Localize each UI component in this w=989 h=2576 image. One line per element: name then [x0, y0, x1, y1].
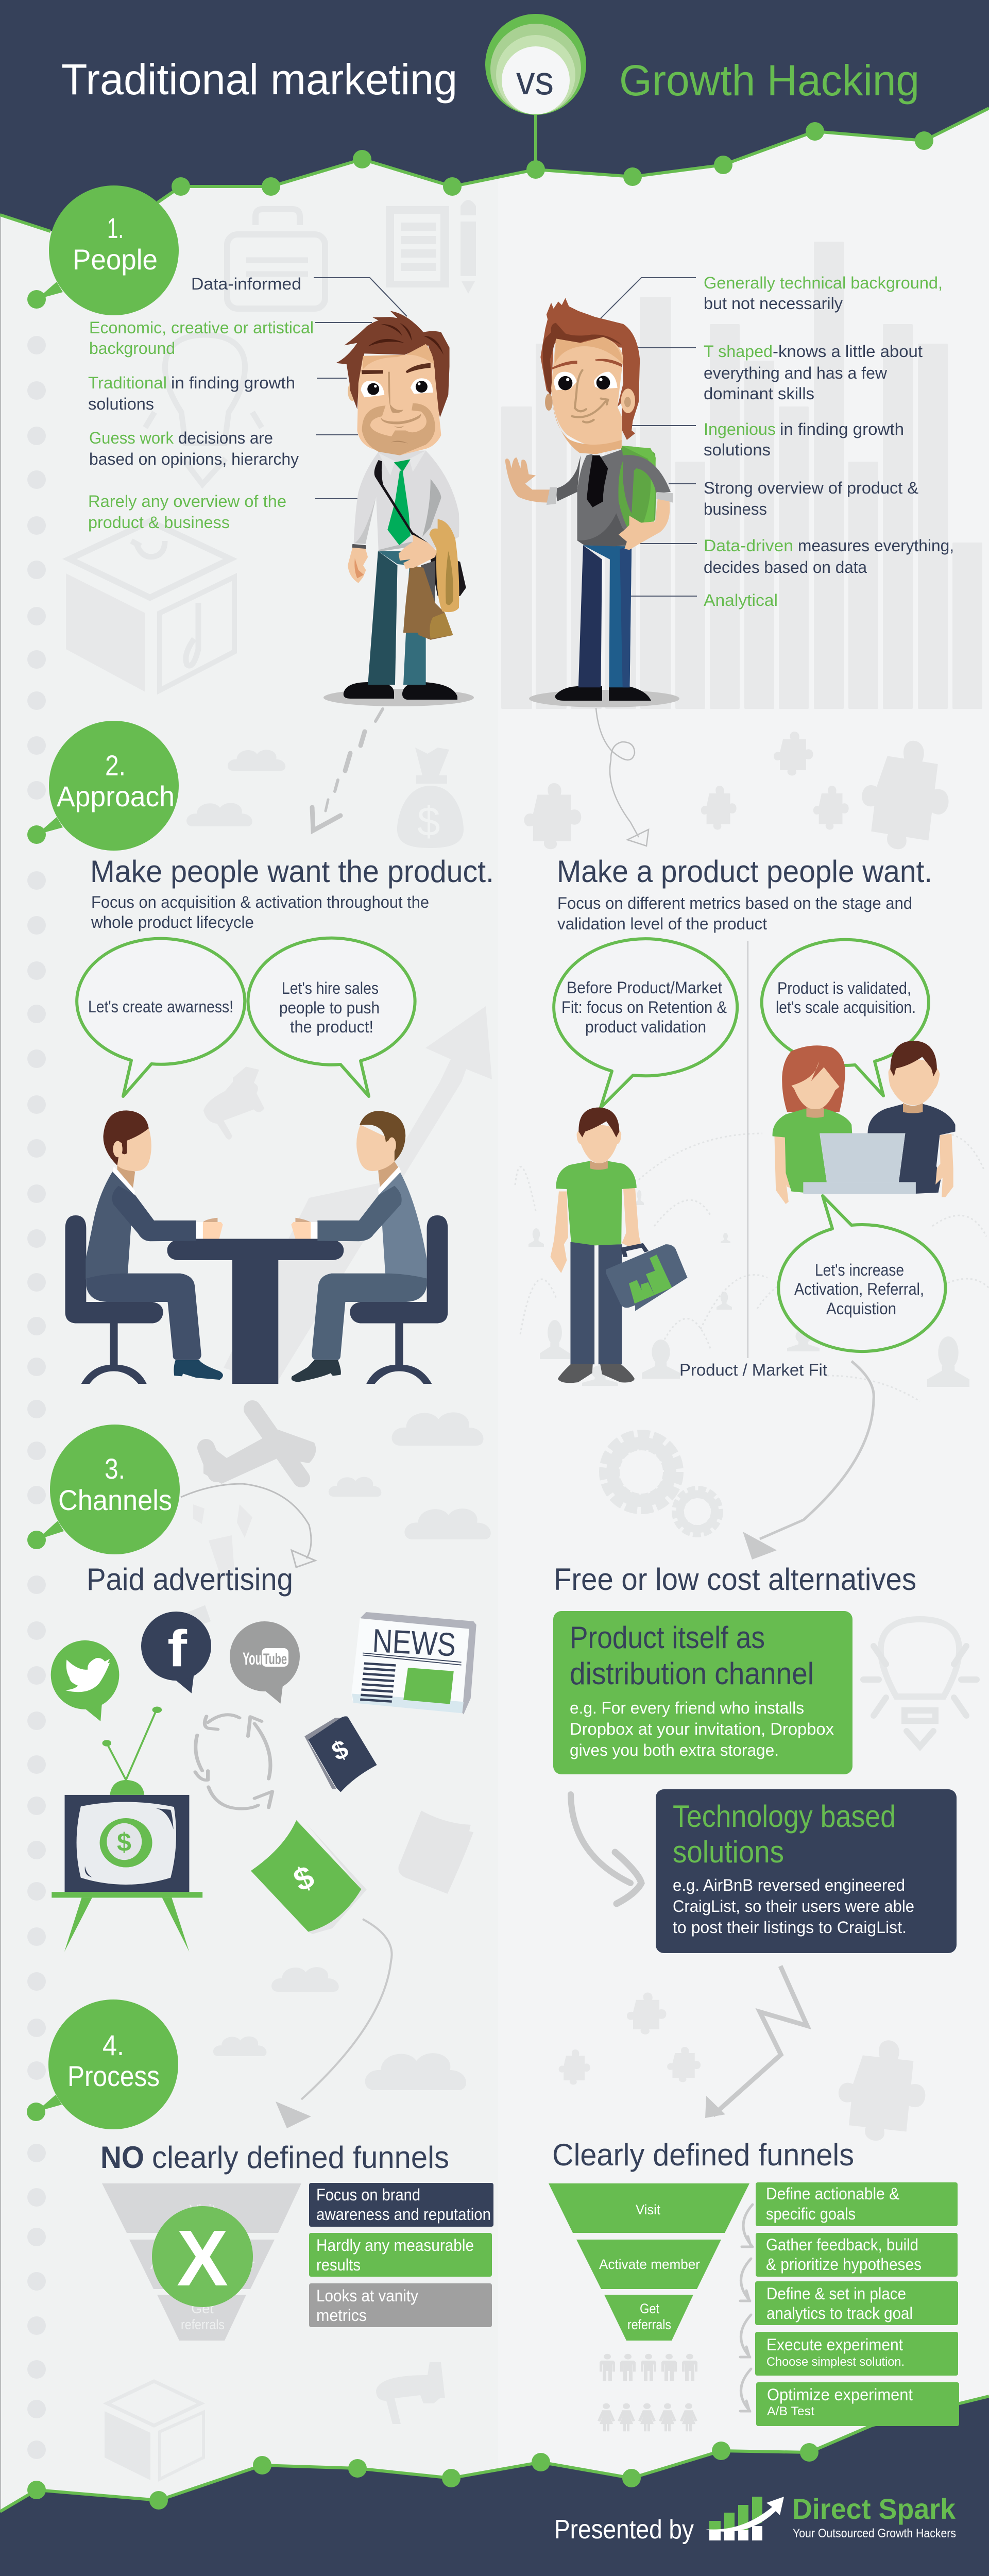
background icon: faint paper: [398, 1810, 473, 1894]
text: growth hacker traits: Ingenious: [704, 420, 776, 438]
text: growth hacker traits: decides based on data: [704, 558, 867, 577]
divider line: [747, 941, 748, 1358]
text: growth approach description: validation level of the product: [557, 914, 767, 933]
character: man with chart briefcase: [551, 1108, 688, 1383]
box: vanity metrics: Looks at vanity: [316, 2286, 418, 2305]
arrow: paid to process: [276, 1919, 392, 2128]
speech bubble: increase activation: Activation, Referral,: [794, 1280, 924, 1298]
text: growth hacker traits: in finding growth: [780, 420, 904, 438]
arrows: between steps: [740, 2205, 753, 2411]
funnel: growth: Get: [640, 2301, 659, 2316]
box: step 4 execute: Choose simplest solution.: [766, 2355, 905, 2369]
vs badge: vs: [516, 58, 554, 103]
text: growth hacker traits: dominant skills: [704, 384, 814, 403]
funnel: crossed out: [102, 2183, 301, 2341]
section badge: 3 Channels: [27, 1425, 180, 1554]
header band: [0, 0, 989, 231]
background icon: megaphone: [203, 1066, 264, 1140]
speech bubble: before fit: Before Product/Market: [567, 978, 722, 997]
card: technology based solutions: to post their listings to CraigList.: [673, 1918, 907, 1937]
speech bubble: product validated: Product is validated,: [777, 979, 911, 997]
heading: make people want the product: Make people want the product.: [90, 854, 494, 889]
box: step 1 goals: Define actionable &: [766, 2184, 899, 2203]
section badge: 1 People: People: [73, 243, 158, 276]
background icon: megaphone bottom: [376, 2362, 445, 2424]
card: technology based solutions: e.g. AirBnB reversed engineered: [673, 1876, 905, 1894]
background icon: suitcase: [227, 209, 325, 309]
box: step 5 optimize: Optimize experiment: [767, 2385, 913, 2404]
text: traditional traits: solutions: [88, 395, 154, 413]
funnel: crossed out: referrals: [181, 2317, 225, 2332]
background icon: big arrow: [224, 1006, 492, 1384]
icon: facebook bubble: [141, 1605, 211, 1693]
background icon: paper and pencil: [386, 200, 476, 294]
section badge: 4 Process: 4.: [103, 2029, 124, 2061]
text: growth hacker traits: solutions: [704, 440, 771, 459]
heading: clearly defined funnels: Clearly defined funnels: [552, 2138, 854, 2172]
vs badge: [485, 14, 586, 115]
box: hardly measurable: Hardly any measurable: [316, 2236, 474, 2255]
icon: youtube bubble: You: [243, 1649, 262, 1669]
funnel: growth: Activate member: [599, 2257, 700, 2272]
background icon: clouds channels: [193, 1412, 491, 1579]
box: step 1 goals: [756, 2182, 958, 2226]
speech bubble: before fit: Fit: focus on Retention &: [561, 998, 727, 1016]
arrow: dashed to approach left: [312, 709, 383, 831]
background icon: lightbulb: [145, 335, 262, 484]
background icon: gears: [609, 1440, 717, 1531]
card: product as distribution channel: Dropbox at your invitation, Dropbox: [570, 1720, 834, 1738]
section badge: 1 People: [27, 185, 179, 315]
icon: youtube bubble: [230, 1621, 300, 1704]
icon: cycle arrows: [195, 1715, 272, 1809]
card: technology based solutions: CraigList, so their users were able: [673, 1897, 914, 1916]
text: traditional traits: background: [89, 339, 175, 358]
speech bubble: increase activation: Let's increase: [815, 1261, 904, 1279]
speech bubble: product validated: let's scale acquisition.: [776, 998, 916, 1016]
funnel: crossed out: X: [177, 2214, 228, 2302]
card: product as distribution channel: distribution channel: [570, 1656, 814, 1691]
card: technology based solutions: [656, 1789, 957, 1953]
speech bubble: create awareness: [77, 939, 245, 1096]
footer: presented by: Presented by: [554, 2515, 694, 2545]
section badge: 2 Approach: 2.: [105, 749, 126, 782]
speech bubble: increase activation: [778, 1196, 945, 1351]
background icon: box bottom: [105, 2381, 203, 2480]
background dots column: [27, 336, 46, 2459]
text: growth hacker traits: Analytical: [704, 591, 778, 609]
icons: people rows: [598, 2354, 697, 2431]
icon: youtube bubble: Tube: [263, 1651, 287, 1668]
card: product as distribution channel: [553, 1611, 852, 1774]
text: growth approach description: [557, 894, 912, 933]
text: growth hacker traits: everything and has a few: [704, 364, 888, 382]
arrow: to technology card: [571, 1794, 641, 1904]
scene: two people at meeting table: [65, 1110, 448, 1384]
icon: dollar note dark: $: [327, 1734, 353, 1766]
box: focus on brand: awareness and reputation: [316, 2205, 491, 2224]
characters: couple with laptop: [773, 1041, 956, 1204]
section badge: 1 People: 1.: [107, 212, 124, 244]
arrow: zigzag to funnels: [705, 1966, 807, 2118]
speech bubble: increase activation: Acquistion: [826, 1299, 896, 1318]
background icon: box with i: [66, 521, 234, 692]
heading: no clearly defined funnels: NO: [100, 2140, 144, 2175]
icon: facebook bubble: f: [167, 1620, 187, 1677]
section badge: 2 Approach: [27, 721, 179, 851]
background icon: plane: [203, 1409, 316, 1484]
text: traditional approach description: [91, 893, 429, 931]
section badge: 3 Channels: 3.: [105, 1452, 125, 1485]
box: step 5 optimize: [756, 2382, 959, 2426]
funnel: growth: Visit: [636, 2202, 660, 2217]
box: step 1 goals: specific goals: [766, 2205, 856, 2223]
background icon: clouds and money bag: [186, 748, 464, 848]
arrow: loop to approach right: [596, 708, 649, 846]
icon: tv with dollar: $: [117, 1828, 131, 1857]
text: traditional traits: Economic, creative or artistical: [89, 318, 314, 337]
card: product as distribution channel: Product itself as: [570, 1620, 765, 1655]
box: step 3 analytics: [755, 2281, 958, 2325]
speech bubble: product validated: [762, 940, 929, 1096]
logo: direct spark mark: [706, 2497, 784, 2540]
box: step 2 feedback: [756, 2233, 958, 2277]
speech bubble: hire sales: people to push: [279, 998, 380, 1017]
text: traditional traits: Guess work: [89, 429, 174, 447]
speech bubble: before fit: product validation: [585, 1018, 706, 1036]
text: traditional traits: decisions are: [178, 429, 273, 447]
funnel: crossed out: Get: [191, 2301, 214, 2316]
icon: dollar note green: [251, 1820, 367, 1934]
text: traditional traits: [88, 275, 314, 532]
text: traditional traits: Rarely any overview of the: [88, 492, 286, 511]
title right: Growth Hacking: [619, 56, 919, 105]
icon: tv with dollar: [52, 1706, 202, 1952]
funnel: growth: [549, 2183, 749, 2341]
card: product as distribution channel: e.g. For every friend who installs: [570, 1699, 804, 1717]
text: growth approach description: Focus on different metrics based on the stage and: [557, 894, 912, 912]
icon: newspaper: [351, 1612, 476, 1715]
box: step 3 analytics: Define & set in place: [766, 2284, 906, 2303]
box: vanity metrics: metrics: [316, 2306, 367, 2325]
character: growth hacker: [505, 298, 679, 707]
text: traditional approach description: whole product lifecycle: [91, 913, 254, 931]
logo: direct spark wordmark: [792, 2493, 956, 2540]
text: growth hacker traits: [704, 274, 954, 609]
background icon: bars chart behind growth hacker: [501, 242, 982, 709]
heading: make a product people want: Make a product people want.: [557, 854, 932, 889]
label: product market fit: Product / Market Fit: [679, 1361, 827, 1379]
box: vanity metrics: [309, 2283, 492, 2327]
text: growth hacker traits: Strong overview of product &: [704, 479, 918, 497]
heading: no clearly defined funnels: clearly defined funnels: [152, 2140, 449, 2175]
section badge: 2 Approach: Approach: [57, 780, 175, 812]
box: step 4 execute: [755, 2332, 958, 2376]
box: step 4 execute: Execute experiment: [766, 2335, 903, 2354]
text: traditional traits: in finding growth: [171, 374, 295, 392]
text: growth hacker traits: but not necessarily: [704, 294, 843, 313]
logo: direct spark wordmark: Direct Spark: [792, 2493, 956, 2525]
footer band: [0, 2396, 989, 2576]
icon: twitter bubble: [51, 1640, 119, 1721]
section badge: 4 Process: Process: [67, 2060, 160, 2092]
box: step 5 optimize: A/B Test: [767, 2404, 814, 2418]
character: traditional marketer: [323, 311, 474, 706]
text: traditional traits: Data-informed: [191, 275, 301, 293]
icon: dollar note green: $: [288, 1859, 319, 1899]
box: focus on brand: [309, 2183, 493, 2227]
card: technology based solutions: solutions: [673, 1835, 784, 1869]
funnel: crossed out: Activate member: [150, 2257, 254, 2272]
section badge: 3 Channels: Channels: [58, 1484, 172, 1516]
arrow: to free alternatives: [743, 1361, 874, 1560]
icon: newspaper: NEWS: [371, 1622, 457, 1663]
heading: paid advertising: Paid advertising: [87, 1562, 293, 1597]
arrow: channels loop: [181, 1484, 315, 1567]
text: growth hacker traits: -knows a little about: [773, 342, 923, 361]
background icon: lightbulb right: [863, 1619, 977, 1747]
card: product as distribution channel: gives you both extra storage.: [570, 1741, 779, 1759]
background icon: faint clouds process: [213, 1967, 466, 2090]
text: traditional approach description: Focus on acquisition & activation throughout the: [91, 893, 429, 911]
card: technology based solutions: Technology based: [673, 1799, 896, 1834]
background: network of people: [515, 1133, 989, 1401]
section badge: 4 Process: [27, 1999, 178, 2129]
heading: free or low cost alternatives: Free or low cost alternatives: [554, 1562, 916, 1597]
leader lines: [314, 278, 697, 596]
background icon: puzzle pieces: [524, 732, 956, 856]
background icon: dollar on bag: $: [417, 799, 440, 844]
speech bubble: hire sales: Let's hire sales: [282, 979, 379, 997]
speech bubble: hire sales: [248, 938, 415, 1096]
text: traditional traits: Traditional: [88, 374, 167, 392]
text: traditional traits: product & business: [88, 513, 230, 532]
background icon: puzzle pieces process: [559, 1993, 930, 2146]
box: step 3 analytics: analytics to track goal: [766, 2304, 913, 2323]
box: step 2 feedback: Gather feedback, build: [766, 2235, 918, 2254]
speech bubble: before fit: [554, 939, 737, 1108]
text: growth hacker traits: Data-driven: [704, 536, 793, 555]
speech bubble: hire sales: the product!: [290, 1018, 373, 1036]
text: growth hacker traits: measures everything,: [798, 536, 954, 555]
funnel: growth: referrals: [627, 2317, 671, 2332]
box: step 2 feedback: & prioritize hypotheses: [766, 2255, 922, 2274]
logo: direct spark wordmark: Your Outsourced Growth Hackers: [793, 2527, 956, 2540]
speech bubble: create awareness: Let's create awarness!: [88, 997, 233, 1016]
box: hardly measurable: results: [316, 2256, 361, 2274]
title left: Traditional marketing: [61, 55, 457, 104]
text: growth hacker traits: business: [704, 500, 767, 518]
box: hardly measurable: [309, 2233, 492, 2277]
text: traditional traits: based on opinions, hierarchy: [89, 450, 299, 468]
funnel: crossed out: Visit: [190, 2202, 216, 2217]
icon: dollar note dark: [304, 1716, 377, 1792]
text: growth hacker traits: T shaped: [704, 342, 773, 361]
text: growth hacker traits: Generally technical background,: [704, 274, 943, 292]
box: focus on brand: Focus on brand: [316, 2185, 420, 2204]
